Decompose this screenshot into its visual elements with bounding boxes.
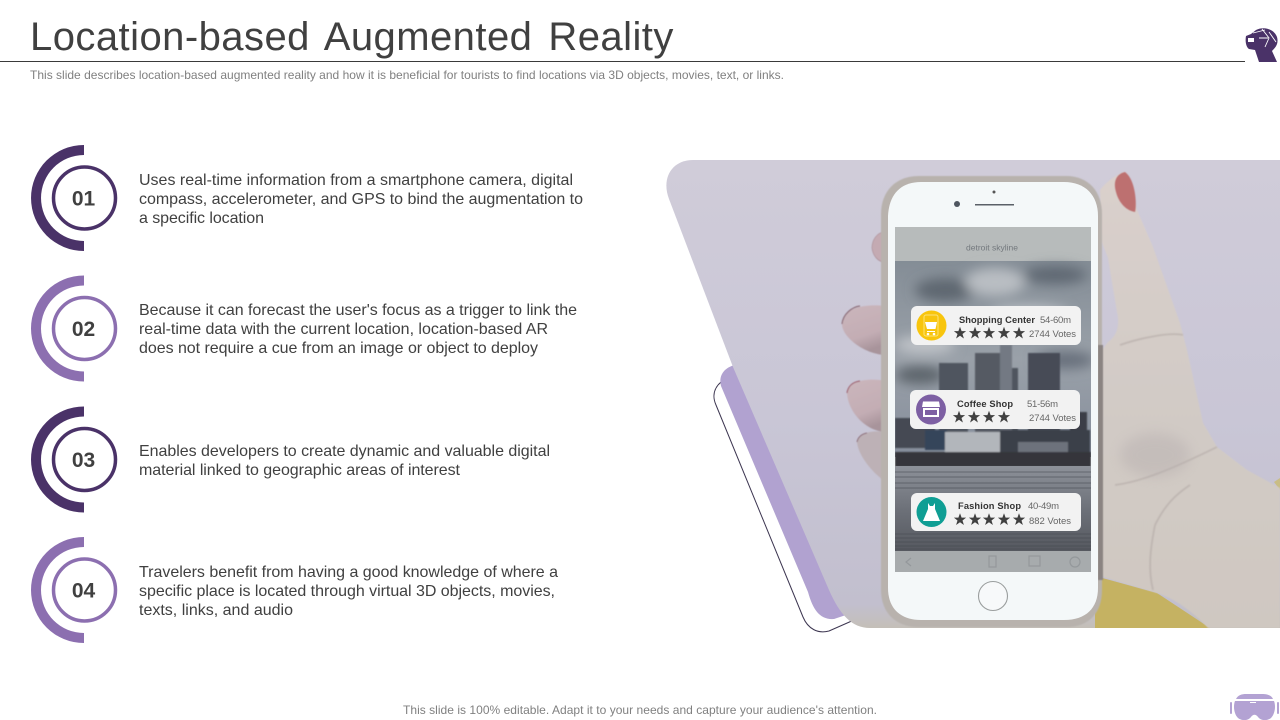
badge 04: 04 xyxy=(72,580,95,602)
star rating xyxy=(954,513,1025,525)
purple accent shape behind photo xyxy=(720,365,855,619)
text 02: Because it can forecast the user's focus as a trigger to link the xyxy=(139,302,577,319)
icon: storefront xyxy=(916,394,946,424)
browser bar xyxy=(895,227,1091,262)
item 04 xyxy=(31,537,558,643)
text 01 xyxy=(139,172,583,227)
text 04: specific place is located through virtual 3D objects, movies, xyxy=(139,583,555,600)
text 01: compass, accelerometer, and GPS to bind the augmentation to xyxy=(139,191,583,208)
fingers behind phone xyxy=(841,232,882,478)
header rule xyxy=(0,61,1245,62)
location card: shopping center xyxy=(911,306,1081,345)
phone body xyxy=(888,182,1098,620)
icon: dress xyxy=(916,497,946,527)
star rating xyxy=(954,327,1025,338)
title: Location-based Augmented Reality xyxy=(30,15,674,59)
photo background xyxy=(660,160,1280,628)
hand and thumb xyxy=(1100,172,1280,628)
badge 03 xyxy=(31,406,115,512)
star rating xyxy=(953,411,1010,422)
location card: shopping center: 54-60m xyxy=(1040,315,1071,326)
location card: fashion shop: Fashion Shop xyxy=(958,501,1021,511)
text 03: Enables developers to create dynamic and valuable digital xyxy=(139,443,550,460)
photo: hand holding smartphone xyxy=(660,160,1280,628)
outline accent behind photo xyxy=(714,382,854,632)
badge 01: 01 xyxy=(72,188,95,210)
location card: shopping center: 2744 Votes xyxy=(1029,329,1076,340)
icon: VR goggles xyxy=(1230,694,1279,720)
palm creases xyxy=(1115,334,1217,590)
text 03 xyxy=(139,443,550,479)
location card: fashion shop xyxy=(911,493,1081,531)
palm shadow xyxy=(1124,436,1186,474)
browser toolbar xyxy=(895,551,1091,572)
badge 02: 02 xyxy=(72,318,95,341)
badge 03: 03 xyxy=(72,449,95,472)
text 04: Travelers benefit from having a good knowledge of where a xyxy=(139,564,558,581)
home button xyxy=(978,582,1008,610)
item 01 xyxy=(31,145,583,251)
toolbar glyphs xyxy=(906,556,1080,567)
location card: coffee shop: Coffee Shop xyxy=(957,399,1013,409)
text 02: does not require a cue from an image or object to deploy xyxy=(139,340,538,357)
table surface xyxy=(1095,576,1210,628)
location card: coffee shop: 51-56m xyxy=(1027,399,1058,410)
item 03 xyxy=(31,406,550,512)
location card: shopping center: Shopping Center xyxy=(959,315,1035,325)
badge 04 xyxy=(31,537,116,643)
phone edge shadow xyxy=(1098,345,1103,580)
text 01: a specific location xyxy=(139,210,264,227)
footer note: This slide is 100% editable. Adapt it to your needs and capture your audience's attention. xyxy=(403,703,877,717)
thumb nail xyxy=(1115,172,1136,212)
badge 02 xyxy=(31,276,115,382)
item 02 xyxy=(31,276,577,382)
phone case xyxy=(881,176,1102,627)
city photo xyxy=(895,261,1095,552)
subtitle: This slide describes location-based augmented reality and how it is beneficial for tourists to find locations via 3D objects, movies, text, or links. xyxy=(30,68,784,82)
text 04: texts, links, and audio xyxy=(139,602,293,619)
text 01: Uses real-time information from a smartphone camera, digital xyxy=(139,172,573,189)
text 04 xyxy=(139,564,558,619)
screen xyxy=(895,227,1095,572)
icon: shopping xyxy=(916,310,946,340)
phone camera and speaker xyxy=(954,190,1014,207)
location card: fashion shop: 882 Votes xyxy=(1029,516,1071,527)
location card: fashion shop: 40-49m xyxy=(1028,501,1059,512)
icon: VR headset head xyxy=(1246,28,1278,62)
text 02: real-time data with the current location, location-based AR xyxy=(139,321,548,338)
smartphone xyxy=(881,176,1103,627)
location card: coffee shop xyxy=(910,390,1080,429)
location card: coffee shop: 2744 Votes xyxy=(1029,413,1076,424)
screen: detroit skyline xyxy=(966,242,1018,252)
badge 01 xyxy=(31,145,115,251)
text 03: material linked to geographic areas of interest xyxy=(139,462,461,479)
text 02 xyxy=(139,302,577,357)
